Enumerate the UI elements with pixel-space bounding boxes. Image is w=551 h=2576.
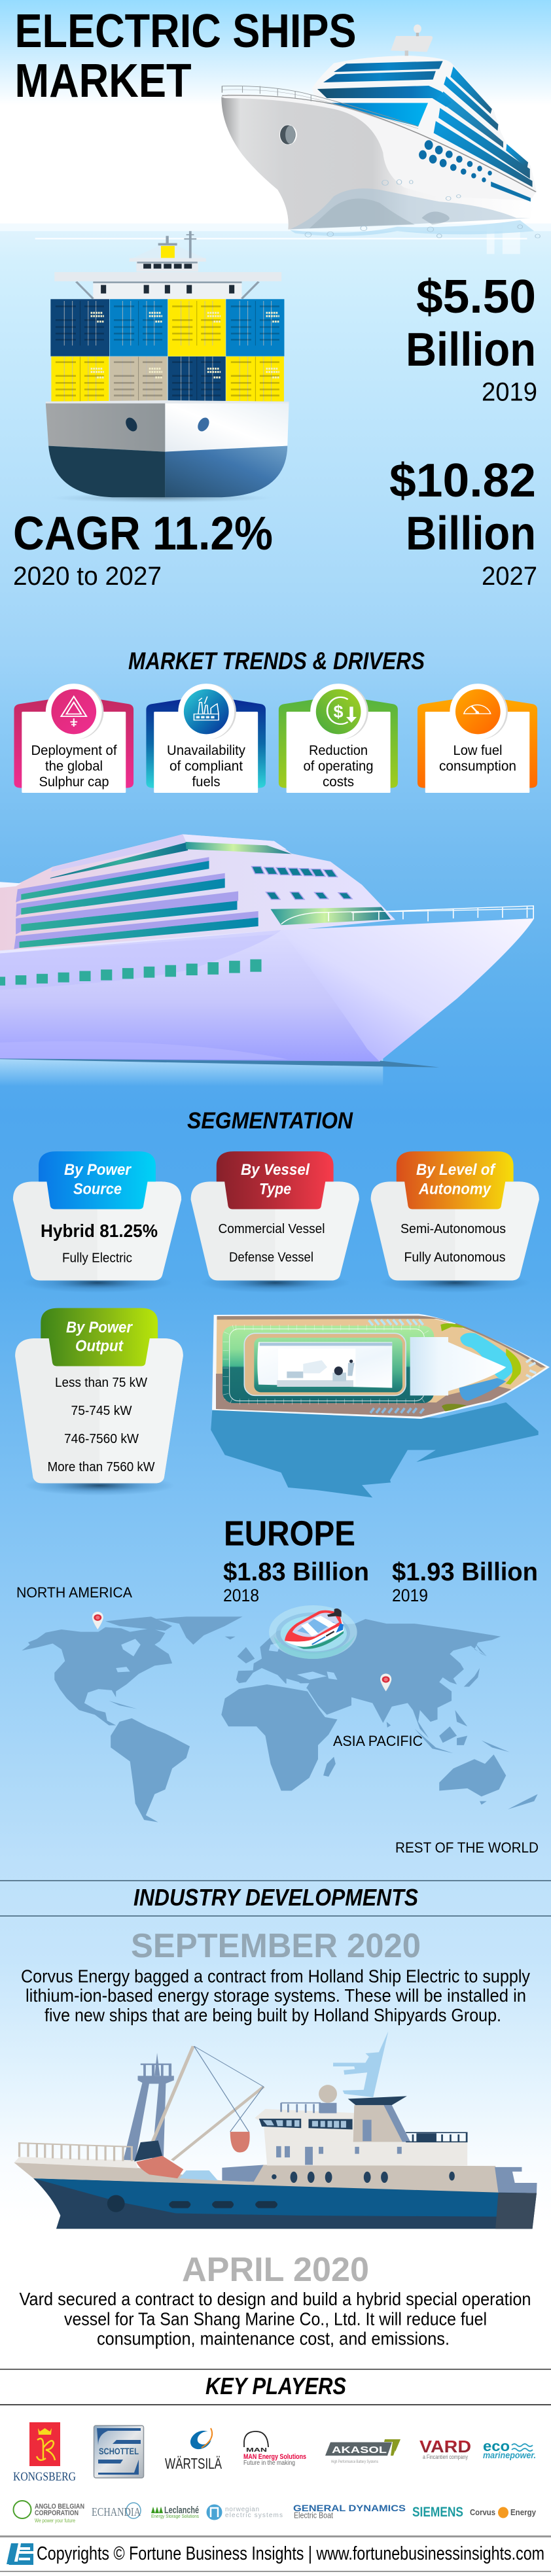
development: September 2020: five new ships that are being built by Holland Shipyards Group.	[44, 2005, 501, 2025]
stat: CAGR: CAGR 11.2%	[13, 508, 273, 560]
winch	[134, 2140, 183, 2178]
development: September 2020	[21, 1927, 530, 2025]
logo: Akasol	[325, 2439, 400, 2464]
map pin: North America	[92, 1612, 103, 1629]
card: compliant fuels: of compliant	[169, 759, 243, 774]
ship shadow	[211, 1402, 539, 1497]
development: September 2020: SEPTEMBER 2020	[131, 1927, 421, 1965]
card: by power source	[13, 1151, 181, 1293]
stat: CAGR	[13, 508, 273, 591]
logo: Wartsila	[165, 2427, 222, 2472]
bow wave	[290, 180, 540, 238]
logo: Norwegian Electric Systems: norwegian	[225, 2506, 259, 2513]
ship superstructure	[312, 56, 537, 193]
card: by vessel type: Defense Vessel	[229, 1251, 313, 1265]
card: by power output: More than 7560 kW	[47, 1460, 155, 1474]
card: operating costs: costs	[323, 775, 354, 790]
card: by power output: Output	[75, 1337, 124, 1355]
stat: CAGR: 2020 to 2027	[13, 562, 162, 591]
card: operating costs: of operating	[304, 759, 373, 774]
heading: market trends and drivers: MARKET TRENDS & DRIVERS	[128, 648, 425, 674]
card: by level of autonomy: Semi-Autonomous	[400, 1222, 506, 1236]
logo: Kongsberg	[13, 2422, 76, 2484]
mast and radar	[391, 24, 433, 56]
panel: segmentation cards	[13, 1151, 539, 1495]
porthole	[279, 125, 297, 145]
logo: Echandia	[92, 2503, 141, 2518]
development: April 2020: vessel for Ta San Shang Marine Co., Ltd. It will reduce fuel	[64, 2309, 487, 2329]
icon: boat on Europe	[269, 1605, 357, 1659]
deck bands	[14, 857, 258, 949]
bow canopy	[410, 1337, 506, 1395]
logo: MAN Energy Solutions: Future in the making	[243, 2459, 295, 2467]
green deck	[222, 1326, 434, 1403]
logo: Norwegian Electric Systems: electric systems	[225, 2512, 283, 2519]
logo: Fortune Business Insights	[7, 2543, 33, 2565]
logo: General Dynamics	[293, 2503, 406, 2520]
development: April 2020: consumption, maintenance cost, and emissions.	[97, 2329, 450, 2348]
world map	[22, 1605, 538, 1822]
logo: Corvus Energy: Energy	[510, 2507, 537, 2517]
logo: MAN Energy Solutions: MAN	[246, 2446, 267, 2453]
panel: key player logos	[13, 2422, 537, 2524]
cabin	[257, 1342, 392, 1388]
stat: Europe 2019: 2019	[392, 1586, 428, 1605]
sea horizon	[0, 224, 551, 254]
palms	[440, 1323, 521, 1411]
stat: Europe 2018: $1.83 Billion	[223, 1558, 369, 1586]
card: by vessel type	[191, 1151, 359, 1293]
logo: Wartsila: WÄRTSILÄ	[165, 2455, 222, 2472]
hull	[14, 2157, 537, 2229]
logo: Eco Marine Power	[483, 2438, 536, 2460]
card: by power source: Hybrid 81.25%	[41, 1221, 158, 1241]
card: low fuel consumption	[418, 684, 537, 793]
row of blue portholes	[419, 140, 492, 183]
map pin: Asia Pacific	[380, 1674, 391, 1692]
crane arms	[153, 2046, 264, 2161]
card: by vessel type: By Vessel	[241, 1161, 310, 1179]
card: by level of autonomy: Fully Autonomous	[404, 1251, 505, 1265]
card: operating costs: $	[333, 702, 344, 722]
illustration: research vessel	[14, 2031, 537, 2229]
containers	[50, 299, 284, 402]
stat: 2027 market size	[389, 455, 537, 591]
funnel and radar dome	[281, 2085, 467, 2142]
card: by level of autonomy: Autonomy	[418, 1180, 492, 1198]
card: low fuel consumption: Low fuel	[453, 743, 503, 758]
stat: 2019 market size: $5.50	[416, 271, 536, 323]
deck chairs	[368, 1319, 423, 1325]
logo: Siemens: SIEMENS	[412, 2505, 463, 2520]
card: compliant fuels: fuels	[192, 775, 220, 790]
panel: regional market	[223, 1514, 538, 1605]
logo: Eco Marine Power: eco	[483, 2438, 510, 2454]
superstructure	[0, 834, 395, 950]
top view of ship	[212, 1314, 550, 1419]
card: by power source: Source	[73, 1180, 122, 1198]
bridge	[255, 2109, 467, 2165]
footer	[0, 2535, 551, 2572]
card: operating costs: Reduction	[309, 743, 368, 758]
logo: Akasol: AKASOL	[332, 2445, 387, 2456]
card: by vessel type: Type	[259, 1180, 291, 1198]
radar mast	[333, 2031, 388, 2097]
logo: Leclanche: Energy Storage Solutions	[151, 2515, 199, 2519]
bow railing	[329, 906, 533, 921]
panel: trend cards	[14, 684, 537, 793]
card: low fuel consumption: consumption	[439, 759, 516, 774]
card: sulphur cap: Deployment of	[31, 743, 117, 758]
hull	[221, 94, 536, 230]
card: by level of autonomy: By Level of	[416, 1161, 496, 1179]
heading: key players: KEY PLAYERS	[205, 2373, 346, 2399]
card: operating costs	[279, 684, 398, 793]
card: by power output: By Power	[66, 1319, 133, 1336]
logo: Corvus Energy	[470, 2507, 537, 2518]
card: by power output: 746-7560 kW	[64, 1432, 139, 1446]
card: by level of autonomy	[371, 1151, 539, 1293]
card: by power source: Fully Electric	[62, 1251, 132, 1265]
logo: Vard: VARD	[419, 2437, 471, 2456]
card: compliant fuels: Unavailability	[167, 743, 245, 758]
stat: 2027 market size: Billion	[406, 508, 536, 560]
card: sulphur cap: the global	[45, 759, 103, 774]
illustration: top-down cruise ship	[211, 1314, 550, 1497]
card: by power output: 75-745 kW	[71, 1404, 132, 1418]
logo: MAN Energy Solutions	[243, 2431, 306, 2467]
upper windows	[251, 867, 352, 899]
hull windows	[0, 959, 262, 986]
logo: Eco Marine Power: marinepower.	[483, 2450, 536, 2460]
heading: industry developments: INDUSTRY DEVELOPMENTS	[133, 1884, 418, 1911]
heading: Europe: EUROPE	[224, 1514, 355, 1553]
stat: Europe 2018: 2018	[223, 1586, 259, 1605]
logo: Akasol: High Performance Battery Systems	[331, 2460, 378, 2464]
label: North America: NORTH AMERICA	[16, 1584, 132, 1601]
card: by power output: Less than 75 kW	[55, 1376, 147, 1390]
card: by power source: By Power	[64, 1161, 132, 1179]
mast and funnel	[132, 231, 205, 258]
logo: Anglo Belgian: ANGLO BELGIAN	[35, 2503, 84, 2511]
title	[14, 5, 356, 107]
illustration: white cruise ship	[221, 24, 540, 238]
title: MARKET	[14, 55, 192, 107]
stat: Europe 2019	[392, 1558, 538, 1605]
hull	[0, 918, 534, 1062]
logo: Norwegian Electric Systems	[207, 2504, 283, 2520]
inland seas	[116, 1639, 338, 1689]
label: Rest of the World: REST OF THE WORLD	[395, 1839, 539, 1856]
title: ELECTRIC SHIPS	[14, 5, 356, 58]
logo: Schottel: SCHOTTEL	[99, 2446, 139, 2456]
development: April 2020: APRIL 2020	[182, 2251, 369, 2289]
continents	[22, 1616, 538, 1822]
stat: 2027 market size: 2027	[482, 562, 537, 591]
logo: Leclanche	[151, 2505, 199, 2519]
logo: General Dynamics: GENERAL DYNAMICS	[293, 2503, 406, 2513]
development: April 2020	[20, 2251, 531, 2348]
card: compliant fuels	[146, 684, 266, 793]
illustration: lilac cruise ship	[0, 834, 534, 1087]
reflection	[0, 1058, 383, 1087]
pools	[459, 1332, 515, 1401]
heading: segmentation: SEGMENTATION	[187, 1108, 353, 1134]
logo: Anglo Belgian: CORPORATION	[35, 2509, 79, 2517]
logo: General Dynamics: Electric Boat	[294, 2511, 333, 2520]
stat: 2019 market size	[406, 271, 537, 407]
illustration: container ship	[46, 231, 289, 503]
logo: Leclanche: Leclanché	[164, 2505, 199, 2516]
label: Asia Pacific: ASIA PACIFIC	[333, 1733, 423, 1749]
logo: Echandia: ECHANDIA	[92, 2505, 141, 2518]
card: sulphur cap	[14, 684, 133, 793]
hull	[46, 400, 289, 497]
fore mast	[123, 2053, 174, 2161]
logo: Kongsberg: KONGSBERG	[13, 2470, 76, 2484]
stat: Europe 2019: $1.93 Billion	[392, 1558, 538, 1586]
stat: 2019 market size: Billion	[406, 324, 536, 376]
stat: Europe 2018	[223, 1558, 369, 1605]
logo: MAN Energy Solutions: MAN Energy Solutions	[243, 2453, 306, 2461]
logo: Anglo Belgian	[13, 2501, 84, 2524]
shadow under hull	[50, 493, 274, 503]
card: by vessel type: Commercial Vessel	[219, 1222, 325, 1236]
stat: 2019 market size: 2019	[482, 378, 537, 407]
bridge and decks	[54, 258, 281, 300]
logo: Anglo Belgian: We power your future	[35, 2518, 75, 2524]
logo: Schottel	[94, 2426, 144, 2478]
fore railing	[20, 2143, 132, 2161]
card: sulphur cap: Sulphur cap	[39, 775, 109, 790]
card: by power output	[15, 1308, 183, 1495]
stat: 2027 market size: $10.82	[389, 455, 536, 507]
logo: Corvus Energy: Corvus	[470, 2507, 495, 2517]
logo: Vard: a Fincantieri company	[423, 2454, 468, 2460]
